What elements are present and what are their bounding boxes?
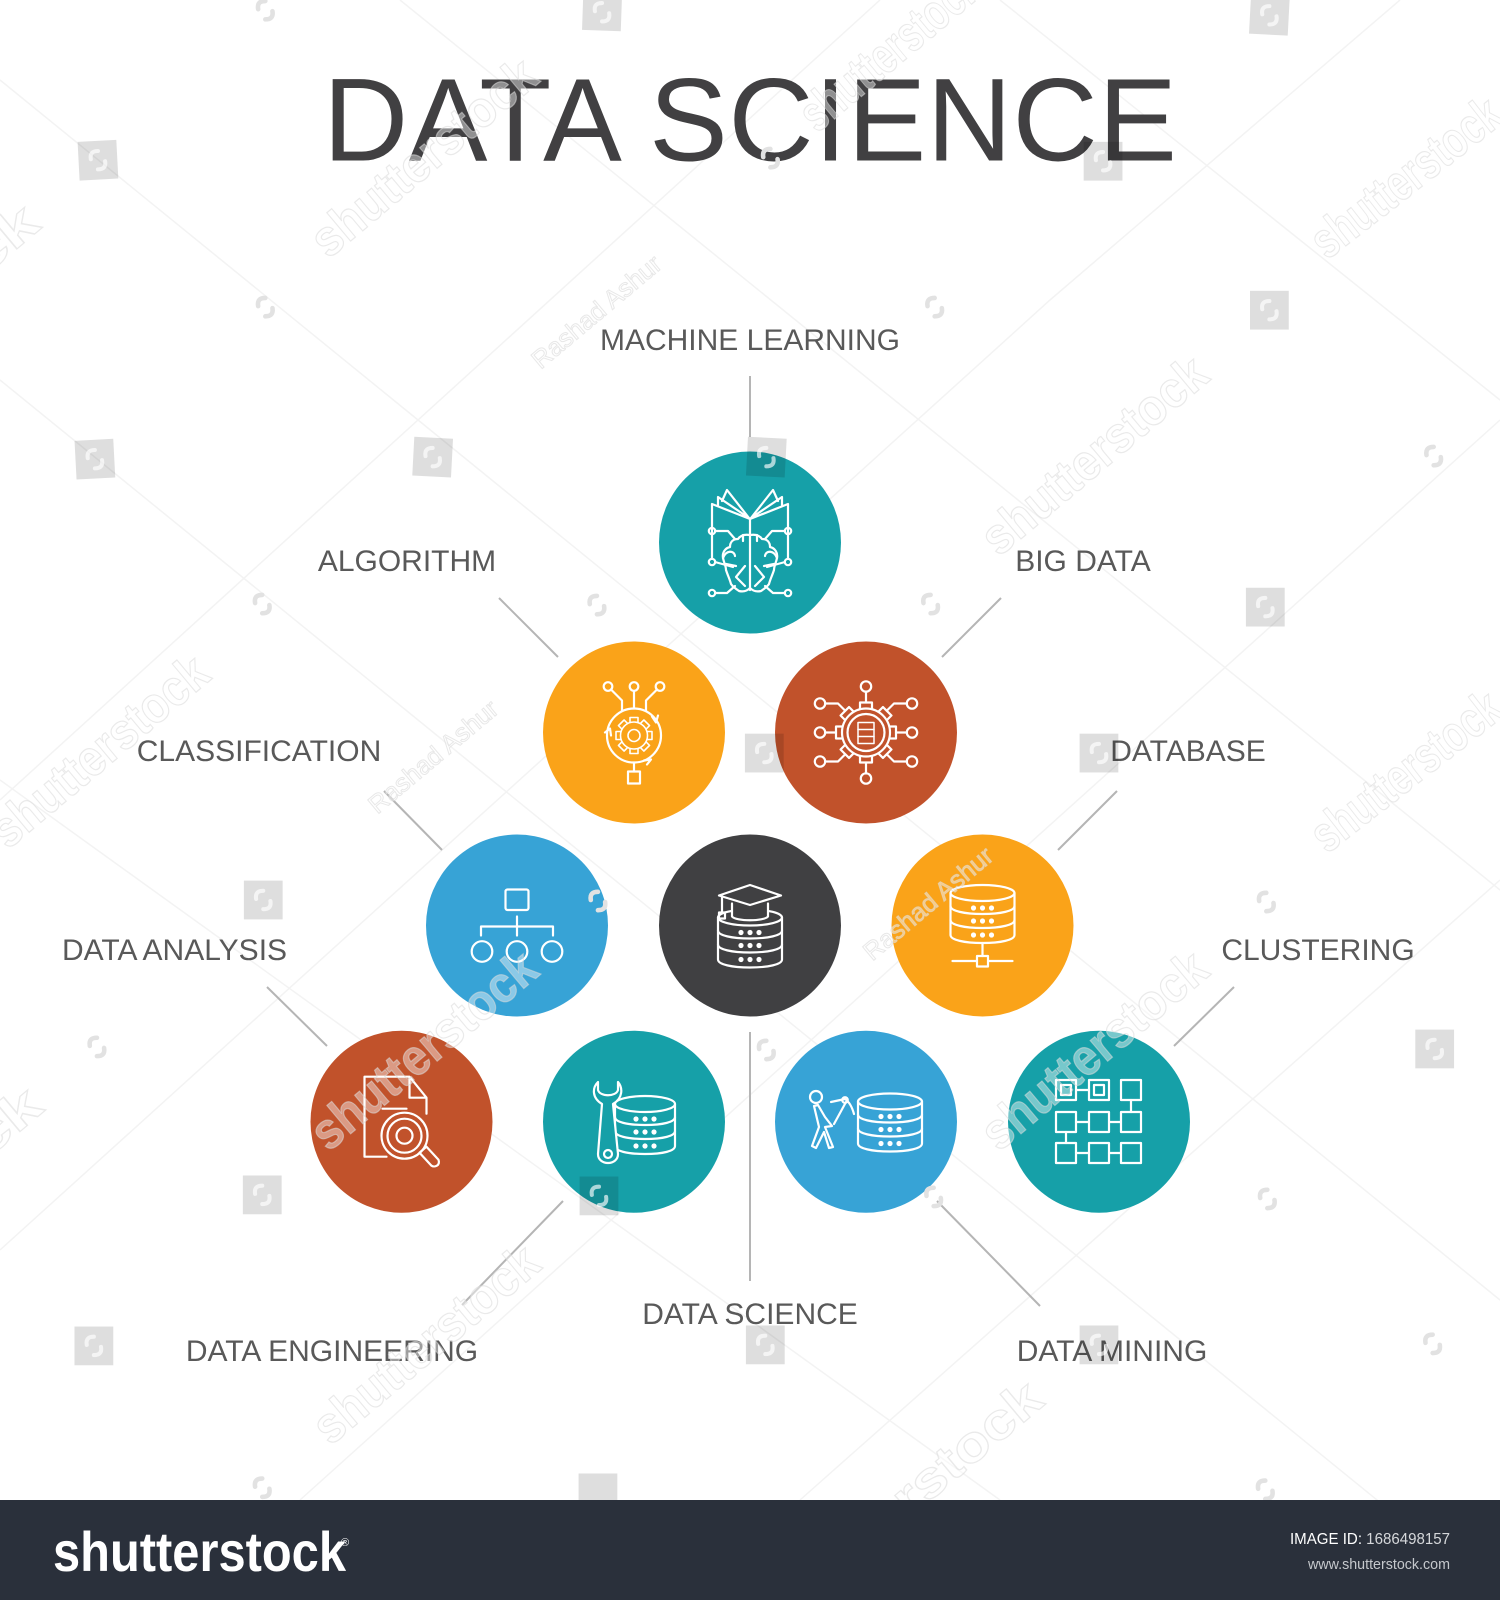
connector: data science [749, 1032, 751, 1281]
circle: machine learning [659, 452, 841, 634]
footer trademark: ® [341, 1537, 349, 1549]
label: big data: BIG DATA [1015, 545, 1151, 578]
icon: book and brain [709, 490, 791, 596]
circle: data science center [659, 834, 841, 1016]
node: big data [775, 545, 1151, 824]
node: data science center [659, 834, 841, 1016]
connector: data mining [937, 1201, 1040, 1306]
node: classification [137, 735, 608, 1016]
footer url: www.shutterstock.com [1307, 1556, 1450, 1573]
footer logo: shutterstock [53, 1520, 347, 1583]
circle: algorithm [543, 642, 725, 824]
connector: data analysis [267, 987, 327, 1046]
label: data engineering: DATA ENGINEERING [186, 1335, 478, 1368]
title: DATA SCIENCE [323, 54, 1177, 186]
footer bar [0, 1500, 1500, 1600]
node: clustering [1008, 934, 1415, 1213]
icon: wrench and database [594, 1082, 675, 1163]
circle: classification [426, 834, 608, 1016]
node: data mining [775, 1031, 1207, 1368]
circle: clustering [1008, 1031, 1190, 1213]
label: machine learning: MACHINE LEARNING [600, 324, 900, 357]
circle: big data [775, 642, 957, 824]
label: data mining: DATA MINING [1017, 1335, 1207, 1368]
icon: miner and database [810, 1091, 922, 1152]
icon: connected squares [1056, 1080, 1141, 1163]
label: database: DATABASE [1110, 735, 1266, 768]
icon: hierarchy tree [472, 890, 562, 962]
node: database [892, 735, 1266, 1016]
label: classification: CLASSIFICATION [137, 735, 381, 768]
watermarks: shutterstock [969, 938, 1219, 1161]
watermarks: Rashad Ashur [363, 695, 504, 819]
circle: data mining [775, 1031, 957, 1213]
connector: database [1058, 791, 1117, 850]
node: data engineering [186, 1031, 725, 1368]
node: data analysis [62, 934, 492, 1213]
watermarks: Rashad Ashur [527, 250, 668, 374]
circle: data analysis [310, 1031, 492, 1213]
label: algorithm: ALGORITHM [318, 545, 496, 578]
label: data science: DATA SCIENCE [642, 1298, 858, 1331]
circle: data engineering [543, 1031, 725, 1213]
watermarks: rstock [880, 1368, 1054, 1527]
node: algorithm [318, 545, 725, 824]
icon: document search [364, 1077, 439, 1166]
label: data analysis: DATA ANALYSIS [62, 934, 287, 967]
icon: graduation cap on database [718, 885, 782, 968]
footer image id: IMAGE ID: 1686498157 [1290, 1531, 1450, 1548]
connector: big data [942, 598, 1001, 657]
watermarks: Rashad Ashur [858, 842, 999, 966]
watermarks: shutterstock [301, 1232, 551, 1455]
icon: big data gear network [815, 681, 917, 784]
icon: algorithm gear [604, 682, 664, 784]
connector: machine learning [749, 376, 751, 437]
icon: networked database [950, 885, 1014, 966]
watermarks: shutterstock [299, 938, 549, 1161]
watermarks: shutterstock [299, 46, 549, 268]
label: clustering: CLUSTERING [1221, 934, 1415, 967]
watermarks: shutterstock [969, 344, 1219, 566]
connector: clustering [1174, 987, 1234, 1046]
connector: algorithm [499, 598, 558, 657]
circle: database [892, 834, 1074, 1016]
connector: data engineering [462, 1201, 563, 1305]
node: machine learning [600, 324, 900, 634]
connector: classification [384, 791, 442, 850]
